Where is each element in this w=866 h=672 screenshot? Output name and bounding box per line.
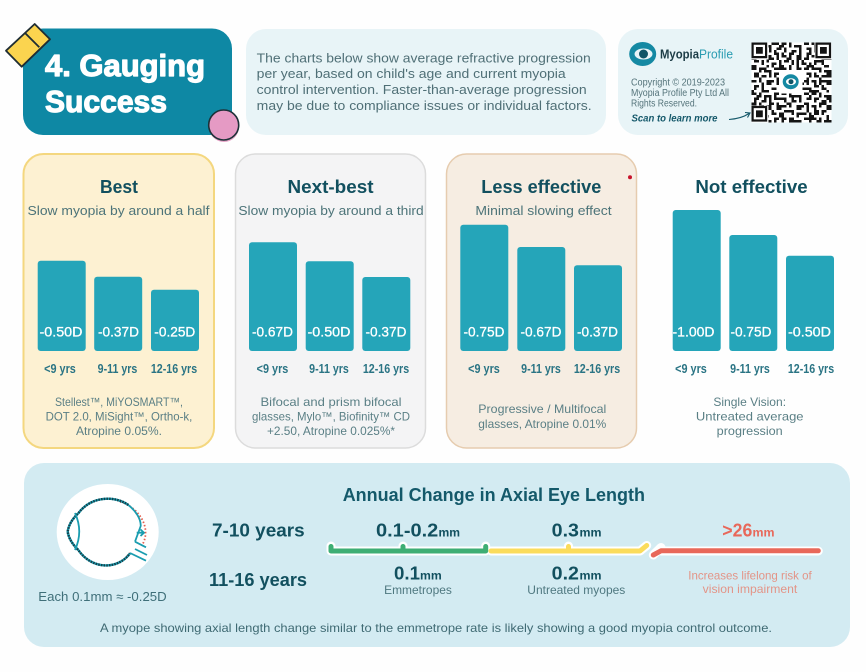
bar chart: Not effective: <9 yrs [675,362,707,376]
icon: Myopia Profile eye logo [629,42,656,66]
scan caption: Scan to learn more [632,113,718,125]
bar chart: Less effective: <9 yrs [468,362,500,376]
value: >26mm [722,521,774,541]
copyright text: Rights Reserved. [631,99,697,110]
value: >26mm: mm [752,526,774,540]
icon: pink circle [209,110,239,142]
bar chart: Best: 9-11 yrs [98,362,137,376]
bar chart: Best: -0.50D [40,324,82,340]
panel: Next-best: Next-best [288,177,374,197]
panel: Best: Stellest™, MiYOSMART™, [55,395,183,409]
heading: Annual Change in Axial Eye Length [343,485,645,505]
intro panel [246,29,606,135]
panel: Not effective: Not effective [695,177,808,197]
panel: Not effective [672,177,834,438]
eye diagram caption: Each 0.1mm ≈ -0.25D [38,589,167,604]
bar chart: Not effective: 9-11 yrs [730,362,770,376]
title text: 4. Gauging [45,48,205,83]
value: 0.2mm untreated myopes: mm [580,568,602,582]
intro panel: may be due to compliance issues or individual factors. [257,98,592,113]
value: >26mm: >26 [722,521,752,541]
value: 0.2mm untreated myopes: Untreated myopes [527,583,625,597]
arrow to QR code [729,112,750,120]
value: 0.1-0.2mm: 0.1-0.2 [376,521,438,541]
row label: 11-16 years: 11-16 years [209,570,307,590]
panel: Best [24,154,214,448]
bar chart: Next-best [249,242,410,376]
scale line [331,546,818,555]
bar chart: Best: -0.37D [98,324,139,340]
panel: axial eye length [24,463,850,647]
logo wordmark [660,46,733,62]
bar chart: Next-best: <9 yrs [257,362,288,376]
bar chart: Not effective: 12-16 yrs [788,362,834,376]
panel: Best: Slow myopia by around a half [28,204,210,218]
value: 0.1mm emmetropes: mm [420,568,442,582]
title text: Success [45,84,167,119]
icon: yellow eraser [6,24,50,67]
bar chart: Less effective [460,225,622,376]
panel: Best: Atropine 0.05%. [76,424,162,438]
bar chart: Best: 12-16 yrs [151,362,197,376]
bar chart: Next-best: -0.67D [252,324,293,340]
bar chart: Best: <9 yrs [44,362,76,376]
value: 0.3mm: mm [580,526,602,540]
risk note: vision impairment [703,582,798,596]
logo wordmark: Profile [699,46,733,62]
bar chart: Less effective: -0.37D [577,324,618,340]
intro panel: per year, based on child's age and current myopia [257,66,567,81]
intro panel: control intervention. Faster-than-average progression [257,82,587,97]
bar chart: Best [38,261,199,376]
intro panel: The charts below show average refractive progression [257,50,591,65]
bar chart: Next-best: -0.37D [366,324,406,340]
value: 0.1mm emmetropes: 0.1 [394,563,420,583]
title panel [23,28,232,135]
value: 0.2mm untreated myopes [527,563,625,597]
copyright text [631,78,729,110]
panel: Less effective: glasses, Atropine 0.01% [478,417,607,431]
panel: Less effective: Minimal slowing effect [475,204,612,218]
bar chart: Less effective: -0.67D [520,324,562,340]
logo wordmark: Myopia [660,46,700,62]
bar chart: Next-best: 12-16 yrs [363,362,409,376]
panel: Next-best [236,154,426,448]
value: 0.3mm: 0.3 [552,521,579,541]
icon: eye diagram [57,484,159,580]
panel: Not effective: Single Vision: [713,395,786,409]
bar chart: Next-best: -0.50D [308,324,350,340]
panel: Best: Best [100,177,138,197]
panel: Next-best: +2.50, Atropine 0.025%* [267,424,395,438]
bar chart: Less effective: 9-11 yrs [521,362,561,376]
bar chart: Less effective: 12-16 yrs [574,362,620,376]
copyright text: Copyright © 2019-2023 [631,78,725,89]
panel: Less effective: Less effective [481,177,601,197]
copyright text: Myopia Profile Pty Ltd All [631,88,729,99]
risk note: Increases lifelong risk of [688,568,812,582]
panel: Not effective: Untreated average [696,410,804,424]
bar chart: Next-best: 9-11 yrs [309,362,349,376]
title block [6,24,239,142]
value: 0.1-0.2mm [376,521,460,541]
footer sentence: A myope showing axial length change similar to the emmetrope rate is likely showing a good myopia control outcome. [100,621,772,635]
bar chart: Not effective [672,210,834,376]
bar chart: Not effective: -0.75D [730,324,772,340]
panel: Next-best: Slow myopia by around a third [238,204,424,218]
value: 0.1mm emmetropes [384,563,452,597]
value: 0.2mm untreated myopes: 0.2 [552,563,579,583]
value: 0.1-0.2mm: mm [438,526,460,540]
bar chart: Not effective: -0.50D [788,324,831,340]
bar chart: Less effective: -0.75D [464,324,504,340]
bar chart: Not effective: -1.00D [672,324,714,340]
row label: 7-10 years: 7-10 years [212,521,305,541]
panel: Not effective: progression [717,424,783,438]
logo and QR panel [618,29,848,135]
panel: Best: DOT 2.0, MiSight™, Ortho-k, [46,410,192,424]
value: 0.3mm [552,521,602,541]
panel: Less effective [446,154,636,448]
QR code [752,42,832,122]
panel: Next-best: Bifocal and prism bifocal [260,395,402,409]
risk note [688,568,812,596]
value: 0.1mm emmetropes: Emmetropes [384,583,452,597]
panel: Less effective: Progressive / Multifocal [478,402,606,416]
title text [45,48,205,119]
panel: Next-best: glasses, Mylo™, Biofinity™ CD [252,410,410,424]
red dot [628,175,632,179]
bar chart: Best: -0.25D [154,324,195,340]
